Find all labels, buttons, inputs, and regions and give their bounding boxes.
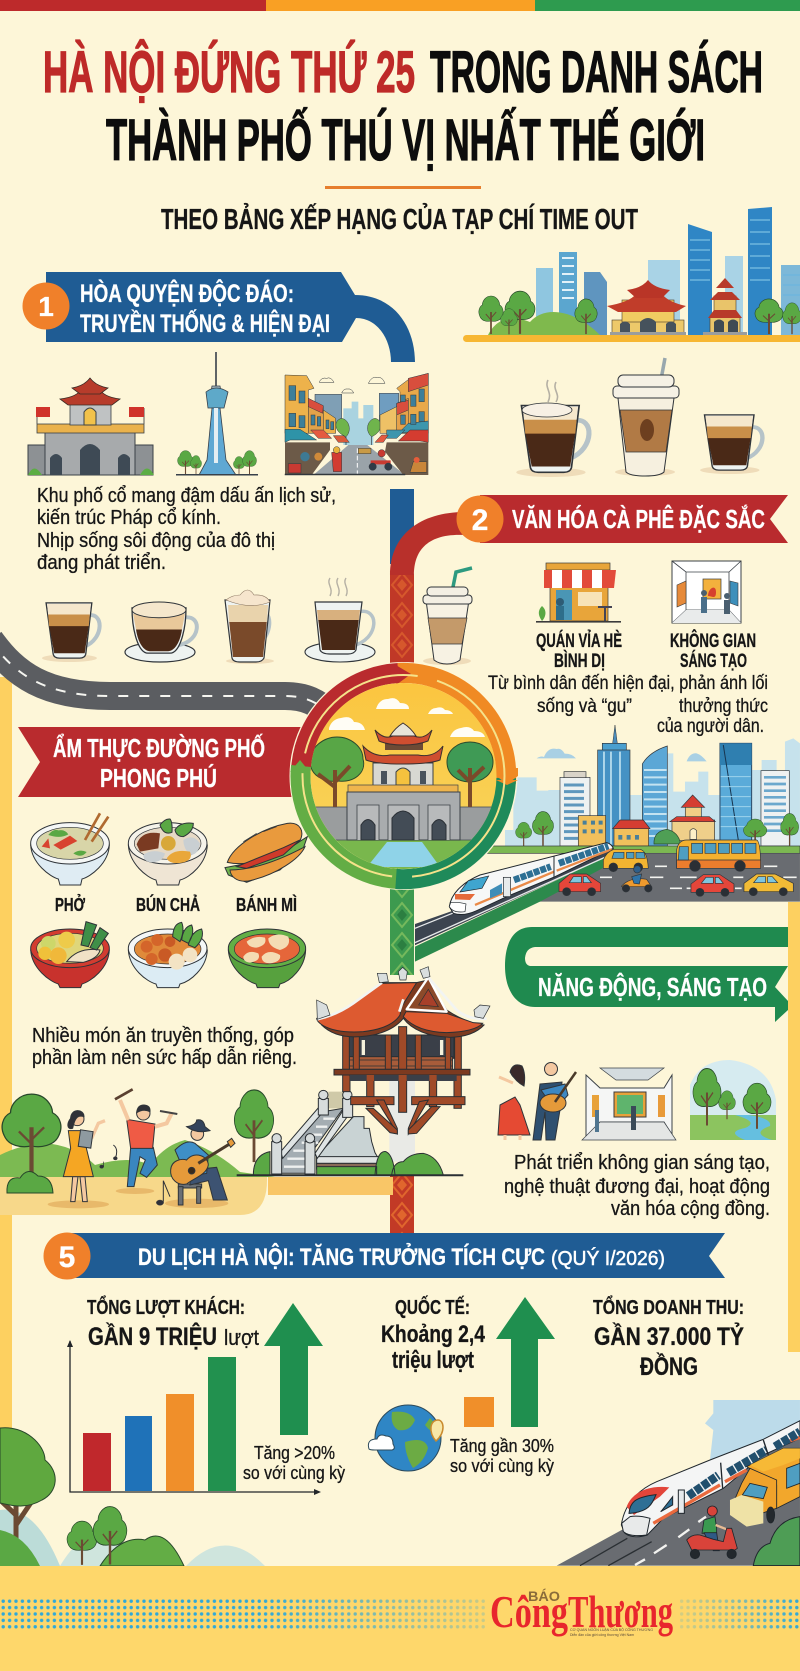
- office tower white: [560, 772, 590, 846]
- heading: street food: [18, 727, 310, 797]
- labels: cafe types: SÁNG TẠO: [680, 650, 747, 672]
- banh mi: [225, 823, 307, 882]
- right office: [761, 771, 789, 846]
- icon: coffee cups top: [516, 358, 762, 477]
- text: creative: [504, 1152, 770, 1220]
- roadside tree: [753, 1517, 800, 1566]
- text: cafe: của người dân.: [657, 715, 764, 737]
- heading 5: [44, 1232, 725, 1280]
- arrow up: [496, 1297, 555, 1427]
- growth note: [243, 1443, 345, 1483]
- badge 5: [44, 1232, 90, 1280]
- growth note: Tăng >20%: [254, 1443, 335, 1463]
- stat: revenue: TỔNG DOANH THU:: [593, 1295, 744, 1319]
- text: street food: Nhiều món ăn truyền thống, góp: [32, 1025, 294, 1047]
- icon: city gate: [28, 378, 154, 475]
- scene: [310, 683, 496, 869]
- side rail right: [788, 902, 800, 1352]
- lower stilts: [343, 1075, 465, 1134]
- text: old quarter: Khu phố cổ mang đậm dấu ấn lịch sử,: [37, 485, 336, 507]
- icon: art gallery: [672, 561, 741, 623]
- food icons row 1: [31, 813, 307, 885]
- labels: cafe types: BÌNH DỊ: [554, 650, 605, 672]
- logo: Diễn đàn của giới công thương Việt Nam: [570, 1632, 635, 1637]
- labels: cafe types: QUÁN VỈA HÈ: [536, 630, 622, 652]
- scooter rider: [687, 1506, 737, 1559]
- gallery: [582, 1068, 676, 1140]
- heading 1: HÒA QUYỆN ĐỘC ĐÁO:: [80, 278, 294, 308]
- bowl: pho: [31, 813, 109, 885]
- heading: street food: ẨM THỰC ĐƯỜNG PHỐ: [53, 733, 265, 763]
- tall glass tower: [720, 743, 752, 843]
- icons: creative activities: [498, 1060, 776, 1140]
- badge 1: [22, 282, 70, 330]
- text: old quarter: đang phát triển.: [37, 552, 166, 574]
- heading 5: (QUÝ I/2026): [551, 1247, 665, 1270]
- pillar: [389, 1078, 415, 1162]
- top colour bar: [0, 0, 800, 11]
- shrubs: [253, 1152, 443, 1175]
- heading 1: TRUYỀN THỐNG & HIỆN ĐẠI: [80, 308, 330, 338]
- text: cafe: [488, 672, 768, 737]
- stat: revenue: GẦN 37.000 TỶ: [594, 1321, 744, 1351]
- truck: [730, 1448, 800, 1527]
- dancing man: [115, 1089, 177, 1187]
- icon: paper cup with bean: [613, 358, 679, 476]
- central emblem: temple of literature: [290, 664, 518, 889]
- logo: BÁO: [528, 1588, 560, 1604]
- bowl: green: [228, 929, 306, 988]
- blue spire tower: [598, 725, 630, 846]
- scene: park path and performers: [0, 1089, 393, 1215]
- riverside park: [690, 1060, 776, 1140]
- stat: international: [368, 1295, 555, 1476]
- stat: total visitors: GẦN 9 TRIỆU: [88, 1321, 217, 1351]
- badge 2: [456, 496, 504, 542]
- icon: street cafe: [536, 563, 621, 623]
- side rail left: [0, 677, 12, 1432]
- icon: tower: [176, 352, 258, 476]
- growth note: [450, 1436, 554, 1476]
- arrow up: [264, 1303, 323, 1435]
- gate tower: [347, 723, 460, 840]
- stat: total visitors: lượt: [224, 1325, 259, 1350]
- railway embankment: [415, 857, 612, 962]
- logo: Công: [490, 1586, 568, 1637]
- woman in yellow: [63, 1111, 105, 1202]
- bowl: meatballs: [128, 922, 207, 988]
- illustration: trees bottom left: [0, 1428, 265, 1566]
- pagoda: [703, 278, 747, 336]
- labels: cafe types: [536, 630, 756, 672]
- text: street food: phần làm nên sức hấp dẫn riêng.: [32, 1046, 297, 1069]
- heading: dynamic creative: [505, 927, 788, 1022]
- curved glass tower: [642, 746, 667, 846]
- illustration: Hanoi skyline top right: [463, 207, 800, 342]
- stat: international: triệu lượt: [392, 1347, 474, 1374]
- low houses: [578, 795, 715, 846]
- trees in emblem: [310, 737, 493, 807]
- coffee cups row: [42, 568, 472, 665]
- ring: [290, 664, 518, 889]
- takeaway cup: [423, 568, 472, 665]
- illustration: one pillar pagoda: [237, 967, 490, 1175]
- illustration: modern city and traffic: [415, 725, 800, 962]
- road: [537, 853, 800, 902]
- stat: international: Khoảng 2,4: [381, 1321, 486, 1348]
- text: creative: Phát triển không gian sáng tạo,: [514, 1152, 770, 1174]
- performers: [48, 1089, 235, 1208]
- heading 2: [456, 495, 788, 543]
- footer: [0, 1566, 800, 1671]
- text: creative: nghệ thuật đương đại, hoạt động: [504, 1176, 770, 1198]
- stat: international: QUỐC TẾ:: [395, 1295, 470, 1319]
- title: HÀ NỘI ĐỨNG THỨ 25: [43, 40, 415, 105]
- illustration: train and traffic bottom right: [557, 1400, 800, 1566]
- orange square: [464, 1397, 494, 1427]
- stat: revenue: [593, 1295, 744, 1381]
- text: street food: [32, 1025, 297, 1069]
- title: [43, 40, 763, 173]
- bar chart: [67, 1340, 321, 1495]
- growth note: Tăng gần 30%: [450, 1436, 554, 1456]
- roof: [322, 980, 484, 1037]
- logo: CƠ QUAN NGÔN LUẬN CỦA BỘ CÔNG THƯƠNG: [570, 1627, 653, 1632]
- temple: [607, 280, 686, 336]
- stat: total visitors: TỔNG LƯỢT KHÁCH:: [87, 1295, 245, 1319]
- central route: [390, 489, 465, 1235]
- icon: globe: [368, 1405, 443, 1471]
- icon: old quarter street: [285, 373, 428, 475]
- growth note: so với cùng kỳ: [450, 1456, 554, 1476]
- text: cafe: thưởng thức: [679, 695, 768, 717]
- heading 5: DU LỊCH HÀ NỘI: TĂNG TRƯỞNG TÍCH CỰC: [138, 1242, 545, 1271]
- tall latte: [225, 590, 274, 664]
- vehicles: [559, 840, 793, 896]
- stairs: [272, 1090, 379, 1174]
- text: old quarter: kiến trúc Pháp cổ kính.: [37, 507, 221, 529]
- text: old quarter: Nhịp sống sôi động của đô thị: [37, 530, 275, 552]
- labels: food: PHỞ: [55, 894, 85, 915]
- text: creative: văn hóa cộng đồng.: [611, 1198, 770, 1220]
- road: [0, 640, 332, 716]
- body: [347, 1035, 454, 1058]
- badge 1: 1: [38, 291, 54, 322]
- stat: revenue: ĐỒNG: [640, 1351, 698, 1381]
- labels: food: BÁNH MÌ: [236, 894, 297, 915]
- ribbon: [46, 272, 415, 362]
- heading 1: [22, 272, 415, 362]
- text: old quarter: [37, 485, 336, 574]
- labels: food: [55, 894, 297, 915]
- badge 2: 2: [472, 504, 488, 537]
- performers duo: [498, 1062, 576, 1140]
- labels: cafe types: KHÔNG GIAN: [670, 630, 756, 652]
- food icons row 2: [31, 922, 306, 988]
- music notes: [100, 1145, 170, 1205]
- stat: total visitors: [67, 1295, 345, 1495]
- labels: food: BÚN CHẢ: [136, 894, 200, 915]
- guitarist: [171, 1120, 235, 1205]
- logo: [490, 1586, 673, 1637]
- heading: street food: PHONG PHÚ: [100, 763, 217, 793]
- dot band: [0, 1596, 800, 1632]
- text: cafe: sống và “gu”: [537, 695, 632, 717]
- bowl: bun cha: [128, 819, 207, 885]
- bowl: red: [31, 922, 109, 988]
- train: [621, 1421, 800, 1537]
- high speed train: [449, 843, 613, 915]
- badge 5: 5: [59, 1241, 75, 1274]
- logo: Thương: [568, 1586, 673, 1637]
- cup on saucer: [305, 602, 375, 662]
- growth note: so với cùng kỳ: [243, 1463, 345, 1483]
